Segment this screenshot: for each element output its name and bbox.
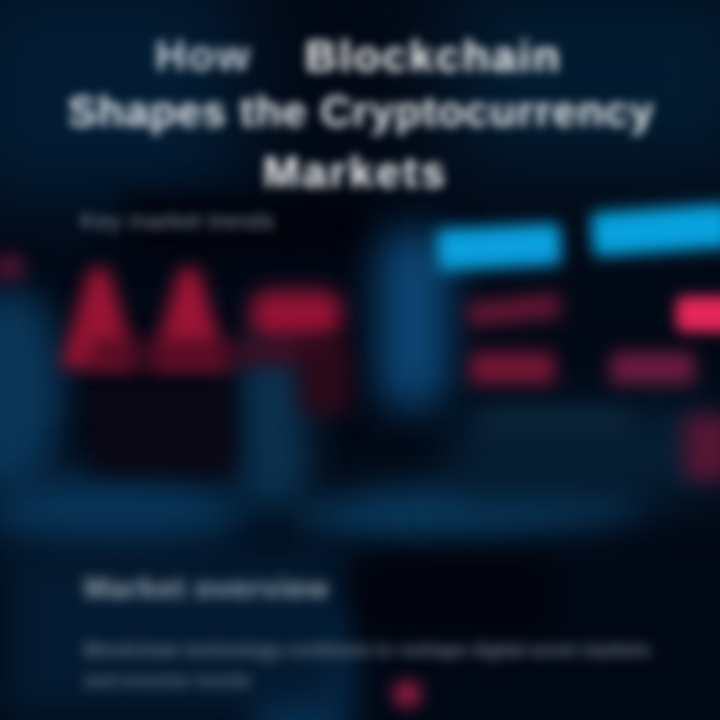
left red chart bbox=[50, 255, 357, 382]
background shape: black centre gap bbox=[120, 195, 370, 255]
background shape: middle blue column bbox=[235, 340, 310, 510]
title line 1: How bbox=[155, 32, 252, 80]
dim red block bbox=[684, 415, 720, 480]
background shape: dark panel left bbox=[90, 375, 235, 475]
background glow: top right blue bbox=[450, 0, 720, 170]
background shape: dark box bbox=[355, 555, 550, 635]
body line 1: Blockchain technology continues to reshape digital asset markets bbox=[84, 640, 650, 660]
dim centre dots bbox=[480, 410, 630, 432]
red peak 1 bbox=[50, 256, 144, 382]
background shape: right blue field bbox=[450, 400, 720, 500]
background shape: centre blue column bbox=[378, 230, 450, 410]
right red chart bbox=[457, 282, 720, 493]
background shape: bottom blue column bbox=[258, 610, 343, 720]
red stripe 1 bbox=[467, 293, 561, 327]
background glow: top left blue bbox=[0, 0, 240, 200]
subheading: Key market trends bbox=[80, 208, 275, 235]
body text bbox=[79, 637, 654, 692]
background shape: lower left wave bbox=[0, 470, 250, 555]
red peak 3 bbox=[250, 290, 342, 340]
red stripe 2 bbox=[470, 352, 555, 384]
edge red mark bbox=[0, 255, 24, 279]
section heading: Market overview bbox=[84, 572, 329, 605]
title line 3: Markets bbox=[263, 148, 448, 197]
body line 2: and investor trends bbox=[84, 671, 251, 691]
background shape: lower right wave bbox=[289, 473, 651, 546]
background shape: left blue mass bbox=[0, 285, 65, 495]
dim red trail bbox=[300, 345, 350, 415]
title line 2: Shapes the Cryptocurrency bbox=[68, 88, 655, 136]
cyan bar right bbox=[591, 203, 720, 257]
title bbox=[64, 32, 660, 197]
title line 1 emphasis: Blockchain bbox=[305, 32, 562, 81]
red stripe 3 bbox=[610, 352, 695, 384]
background shape: lower band bbox=[0, 545, 350, 720]
bright pink marker bbox=[676, 296, 720, 332]
red base bbox=[90, 342, 340, 364]
cyan bar left bbox=[436, 223, 562, 271]
red dot bbox=[392, 680, 422, 708]
red peak 2 bbox=[144, 255, 234, 382]
